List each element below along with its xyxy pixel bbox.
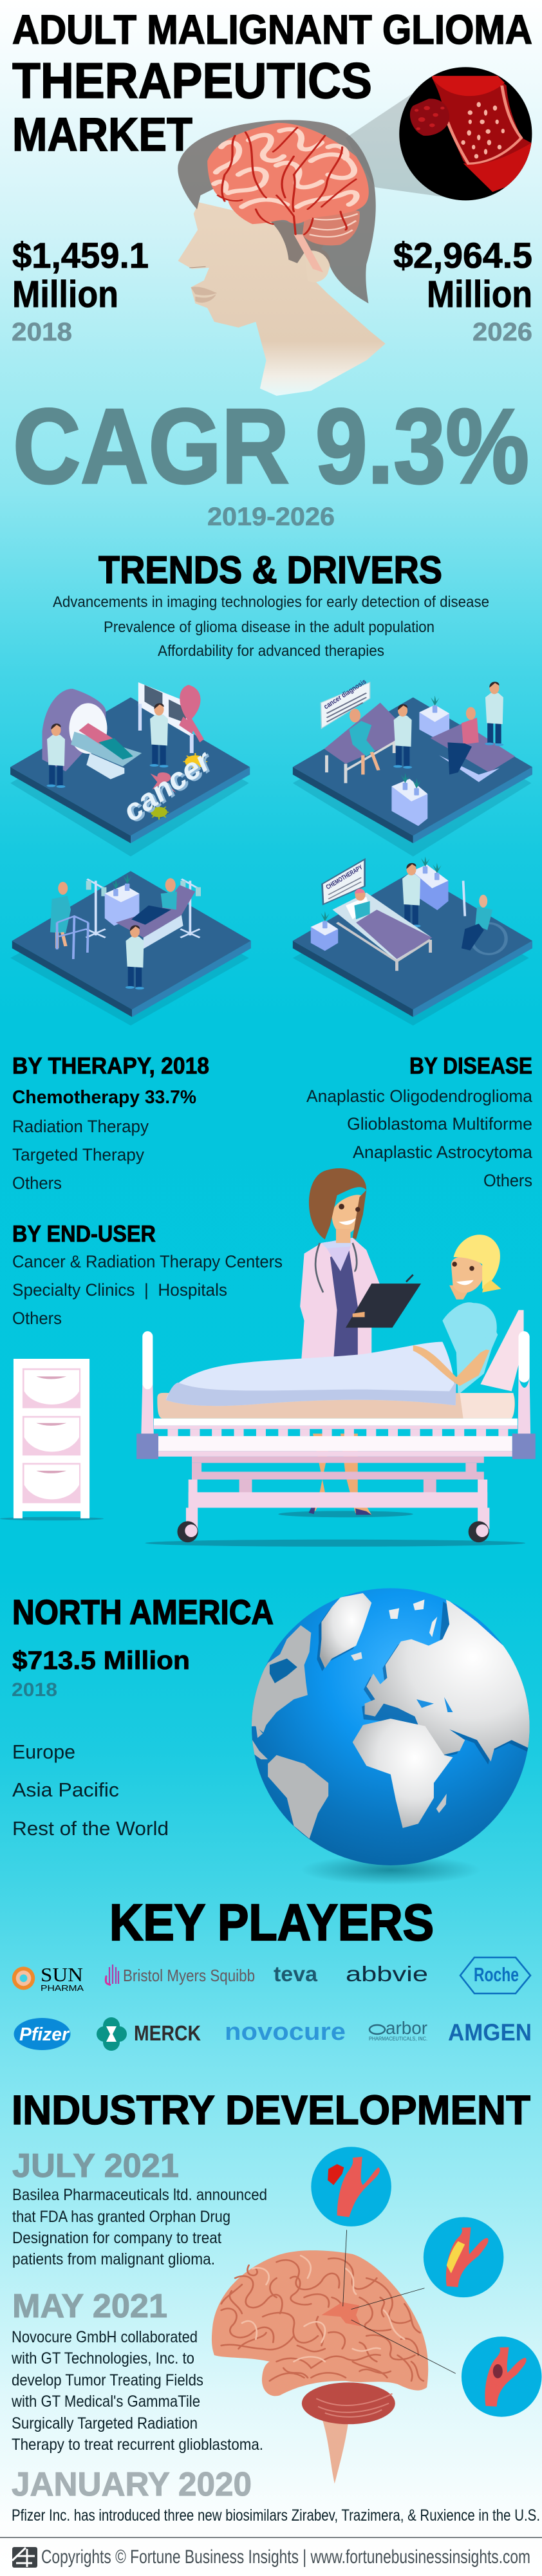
trends list: Prevalence of glioma disease in the adult population [104,619,435,636]
market size 2026 [393,235,532,346]
segment: by disease: Others [483,1171,532,1190]
segment: by end-user: BY END-USER [12,1220,156,1247]
icon: brain stem [320,2413,348,2483]
region: north america: 2018 [12,1679,57,1701]
icon: patient with walker [50,896,71,933]
market size 2018 [12,235,149,346]
icon: X-ray board [138,682,192,737]
development: May 2021: MAY 2021 [12,2288,167,2325]
icon: bedside table [311,920,338,951]
panel: imaging and cancer isometric scene [10,682,250,857]
segment: by disease: Glioblastoma Multiforme [347,1114,532,1134]
icon: vessel callout with plaque [424,2217,503,2297]
other regions [12,1741,169,1840]
segment: by end-user [12,1220,283,1328]
water: hudson bay [270,1659,297,1683]
logo: bristol myers squibb: Bristol Myers Squibb [123,1966,255,1985]
title: MARKET [12,109,192,161]
continent: madagascar [436,1794,447,1813]
icon: chemotherapy sign [322,859,365,904]
footer logo [12,2547,37,2568]
icon: magnified vessel lens [399,67,539,200]
development: July 2021: that FDA has granted Orphan Drug [12,2208,230,2226]
icon: drawer cabinet [0,1359,104,1520]
trends list: Advancements in imaging technologies for early detection of disease [53,593,489,611]
icon: vessel callout with clot dark [462,2337,541,2417]
icon: MRI scanner [42,689,106,771]
cancer 3D word: cancer [119,744,221,829]
panel: chemotherapy isometric scene [293,857,532,1025]
icon: yellow virus [183,753,207,770]
icon: hair [178,120,376,303]
logo: abbvie: abbvie [346,1962,428,1986]
illustration: head with brain and magnified vessel [178,67,539,396]
segment: by therapy: Targeted Therapy [12,1145,144,1164]
icon: exam bed left [324,703,406,764]
logo: novocure: novocure [225,2019,346,2046]
segment: by therapy: Others [12,1173,62,1193]
icon: pink cell [151,772,176,793]
trends list: Affordability for advanced therapies [158,642,384,660]
title: THERAPEUTICS [12,52,372,109]
icon: cabinet [412,864,448,910]
segment: by therapy: Radiation Therapy [12,1117,149,1136]
other regions: Asia Pacific [12,1778,119,1801]
other regions: Europe [12,1741,75,1763]
icon: wheelchair patient [463,881,465,916]
icon: tall cabinet with plants [391,779,427,826]
segment: by disease: Anaplastic Astrocytoma [353,1143,533,1162]
segment: by end-user: Specialty Clinics | Hospitals [12,1280,227,1300]
icon: treatment chair and patient [116,885,195,938]
development: May 2021: Novocure GmbH collaborated [12,2328,198,2346]
icon: seated patient pink [462,718,479,745]
illustration: doctor and patient in hospital room [0,1168,536,1547]
icon: awareness ribbon [179,685,204,742]
icon: seated patient [349,721,375,756]
icon: cerebellum [302,2382,395,2424]
region: north america: NORTH AMERICA [12,1593,274,1632]
icon: diagnosis sign [321,682,370,729]
development: May 2021: Therapy to treat recurrent glioblastoma. [12,2436,263,2454]
icon: doctor [300,1168,421,1515]
logo: amgen: AMGEN [448,2019,532,2046]
sign text: chemotherapy: CHEMOTHERAPY [325,864,364,891]
other regions: Rest of the World [12,1817,169,1840]
market size 2018: Million [12,274,118,315]
illustration: brain with vessel callouts [212,2147,541,2483]
development: May 2021 [11,2288,263,2454]
island: novaya zemlya [429,1617,437,1637]
development: July 2021: Basilea Pharmaceuticals ltd. announced [12,2186,267,2204]
market size 2026: 2026 [472,318,532,346]
icon: cabinet [105,885,139,926]
development: May 2021: develop Tumor Treating Fields [12,2371,203,2389]
heading: key players: KEY PLAYERS [109,1894,434,1951]
continent: north america [251,1625,312,1733]
market size 2026: Million [427,274,532,315]
continent: south america [268,1755,328,1839]
segment: by therapy: BY THERAPY, 2018 [12,1052,209,1079]
icon: hospital bed [333,893,431,961]
icon: hospital bed and patient [136,1235,536,1542]
icon: head and neck [178,202,386,396]
logo: merck [97,2017,201,2051]
development: May 2021: with GT Technologies, Inc. to [11,2349,194,2367]
icon: magnifier cone [346,88,449,198]
island: svalbard group [389,1600,424,1619]
logo: pfizer [14,2018,71,2050]
icon: floor shadows [145,1511,525,1547]
region: north america [12,1593,274,1701]
logo: pfizer: Pfizer [19,2024,70,2045]
CAGR period: 2019-2026 [207,503,335,531]
continent: greenland [320,1593,371,1668]
segment: by disease: Anaplastic Oligodendroglioma [306,1087,533,1106]
panel: infusion isometric scene [10,871,251,1025]
logo text: sun pharma: PHARMA [41,1983,84,1993]
logo: roche: Roche [474,1963,519,1986]
company logos [12,1966,35,1990]
icon: exam bed right [431,723,515,772]
development: May 2021: Surgically Targeted Radiation [12,2414,198,2432]
icon: globe [242,1588,539,1885]
logo: arbor pharmaceuticals: arbor [386,2018,427,2038]
callout lines [343,2230,456,2373]
icon: vessel callout with clot [311,2147,391,2226]
development: January 2020: JANUARY 2020 [12,2466,252,2503]
cancer 3D word: cancer [117,743,218,828]
segment: by end-user: Cancer & Radiation Therapy Centers [12,1252,283,1271]
segment: by therapy: Chemotherapy 33.7% [12,1087,196,1108]
region: north america: $713.5 Million [12,1647,190,1675]
logo: teva: teva [274,1962,318,1986]
heading: trends and drivers: TRENDS & DRIVERS [98,548,442,592]
title [12,6,532,161]
development: July 2021: Designation for company to treat [12,2229,221,2247]
panel: cancer diagnosis isometric scene [293,682,532,857]
market size 2018: 2018 [12,318,72,346]
logo: merck: MERCK [134,2021,201,2045]
continent: central america [252,1725,268,1759]
development: July 2021 [12,2147,267,2268]
logo: roche [460,1957,530,1993]
icon: drawer cabinet [419,705,449,738]
development: July 2021: patients from malignant glioma. [12,2250,215,2268]
development: May 2021: with GT Medical's GammaTile [11,2393,200,2411]
segment: by disease [306,1052,533,1190]
continent: eurasia [365,1598,539,1762]
logo text: sun pharma: SUN [41,1963,83,1986]
icon: cerebrum [212,2250,428,2396]
market size 2018: $1,459.1 [12,235,149,275]
continent: africa [353,1719,453,1828]
icon: brain [207,123,369,272]
segment: by therapy [12,1052,209,1193]
sign text: cancer diagnosis: cancer diagnosis [322,678,368,711]
logo: arbor pharmaceuticals [369,2018,427,2042]
market size 2026: $2,964.5 [393,235,532,275]
segment: by end-user: Others [12,1309,62,1328]
heading: industry development: INDUSTRY DEVELOPMENT [12,2087,530,2133]
footer rule [0,2537,542,2538]
water: black and caspian seas [416,1697,453,1712]
development: January 2020 [12,2466,540,2525]
logo: arbor pharmaceuticals: PHARMACEUTICALS, INC. [369,2036,427,2042]
icon: green virus [149,805,169,819]
island: iceland [351,1652,362,1661]
development: July 2021: JULY 2021 [12,2147,179,2185]
trends list [53,593,489,660]
logo: sun pharma [12,1966,35,1990]
